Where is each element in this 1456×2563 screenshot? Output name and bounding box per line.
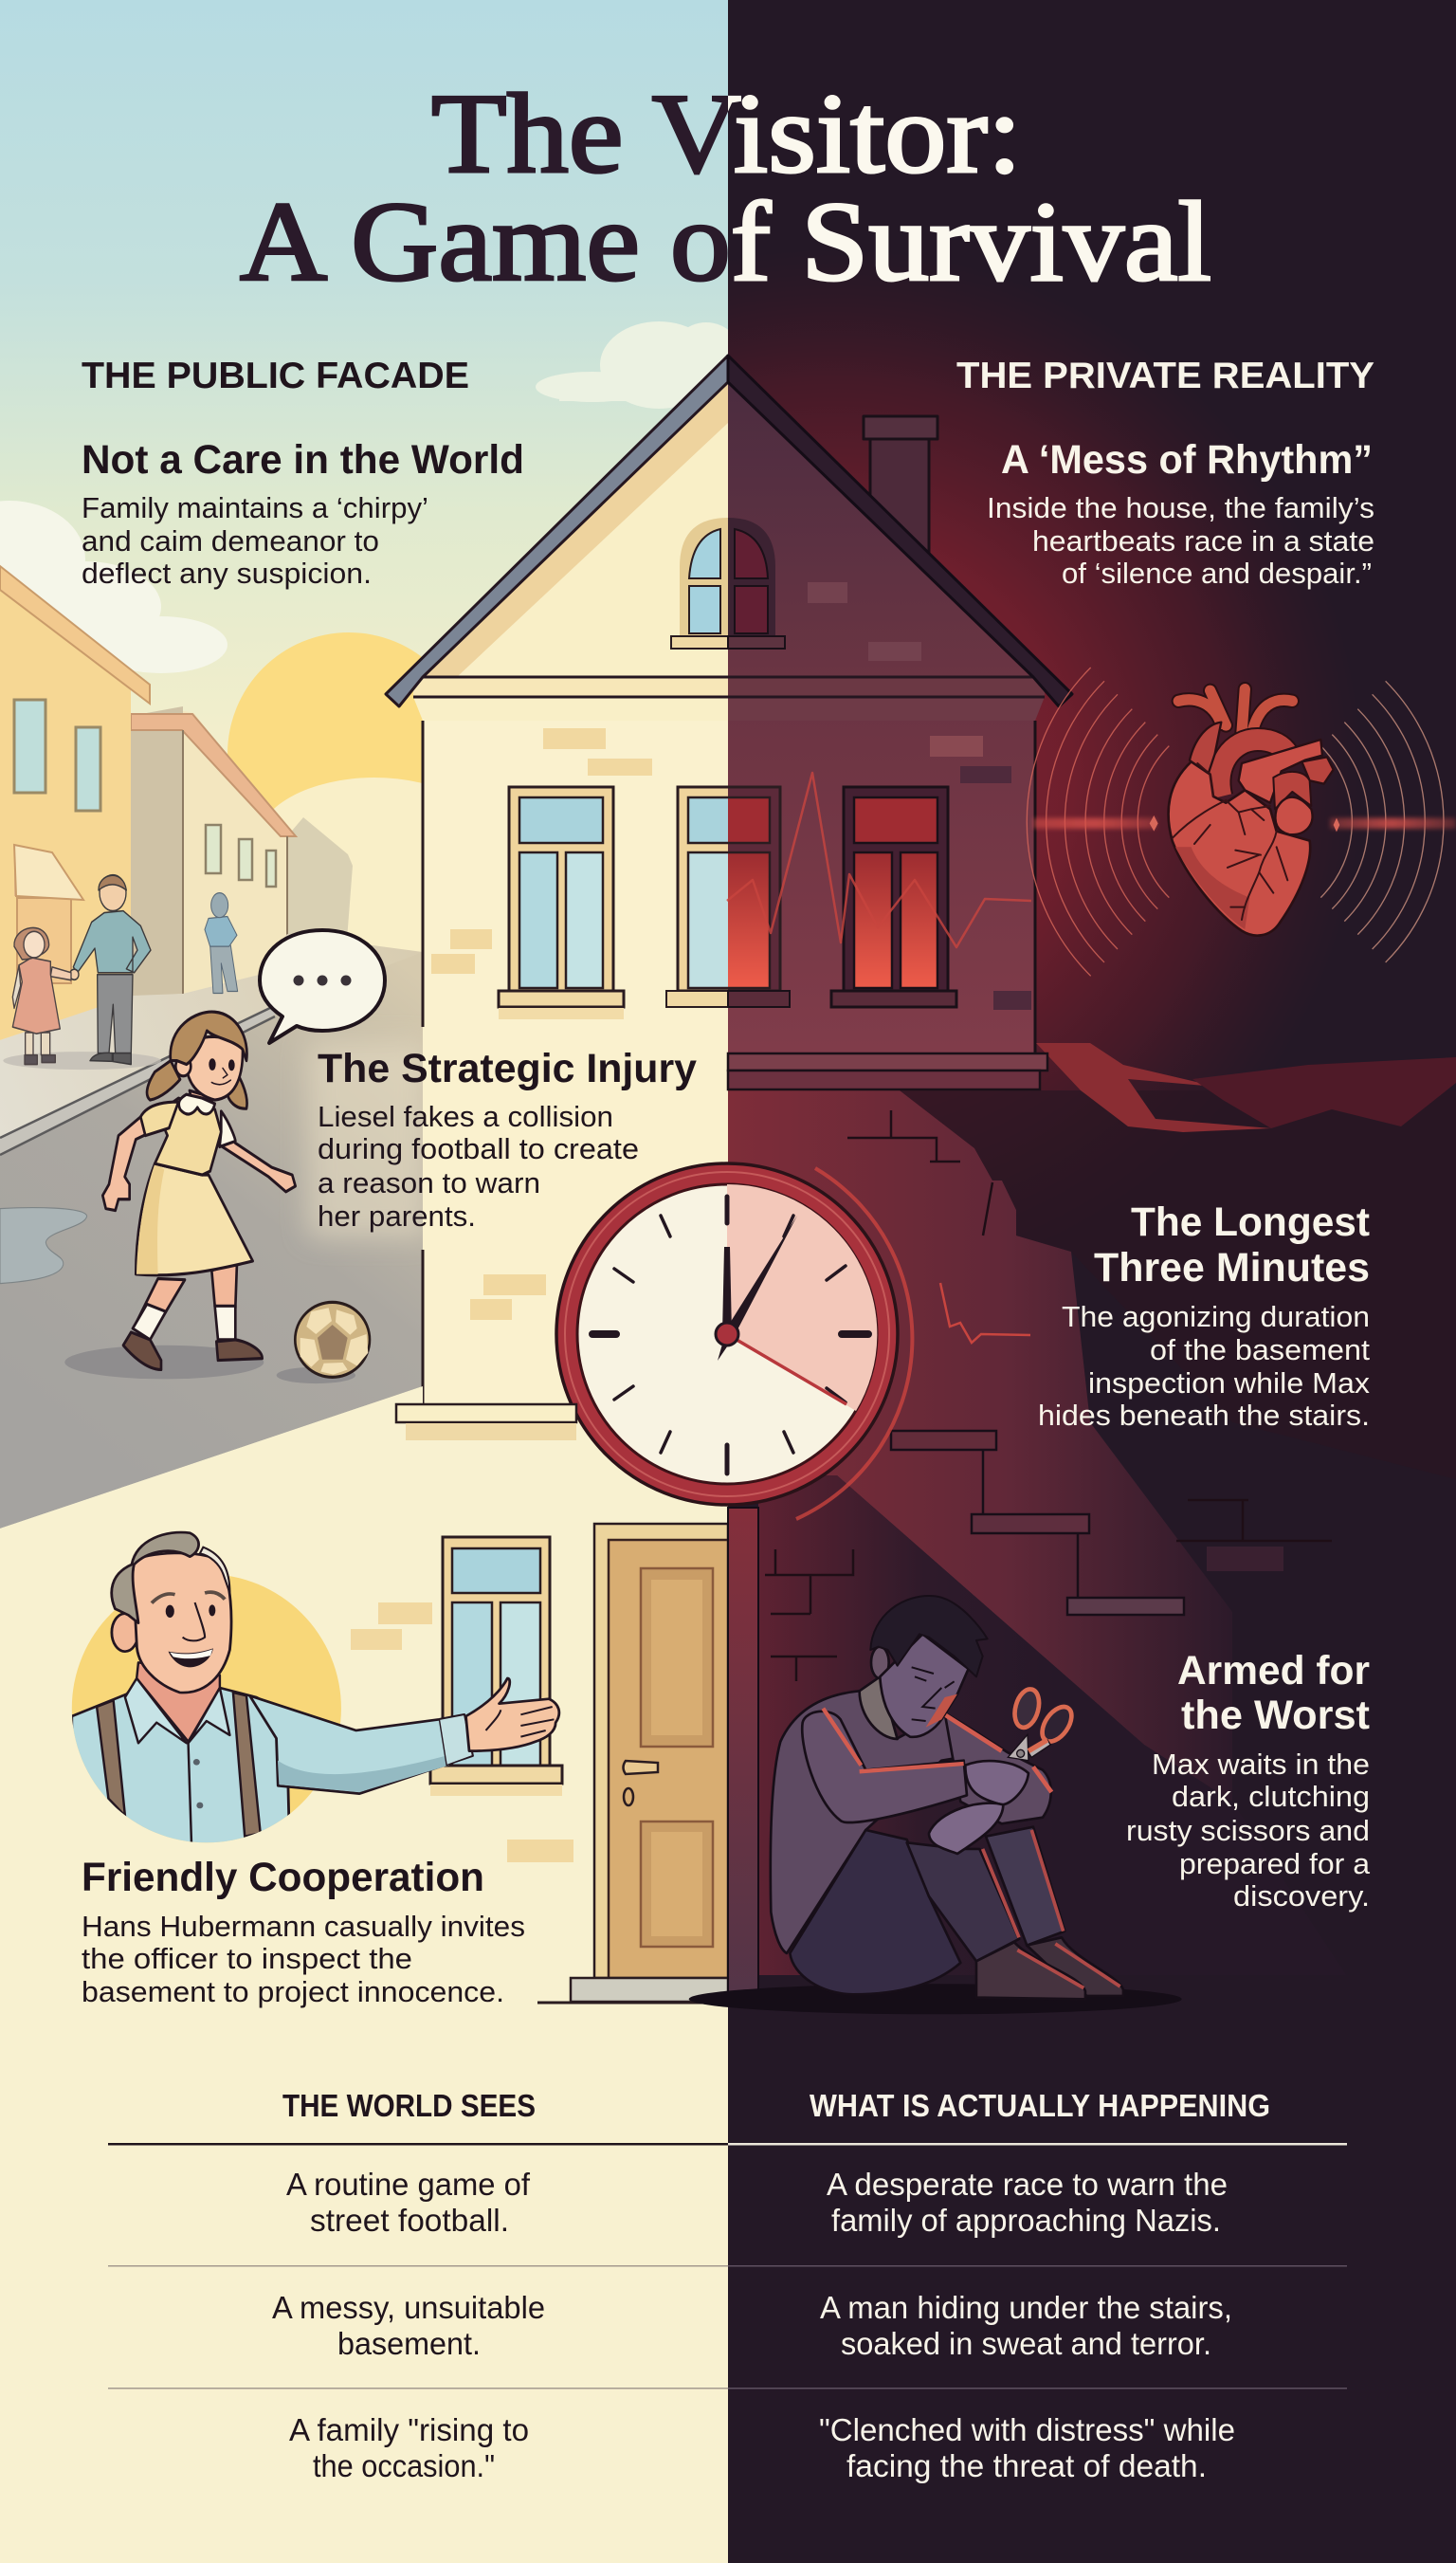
legs [123, 1263, 263, 1369]
distant figures and puddle [0, 875, 238, 1284]
ventricles [1169, 761, 1310, 936]
text block: not a care in the world: Family maintains a ‘chirpy’ [82, 491, 428, 524]
house: left half wall [423, 697, 728, 1519]
ledge shadow [406, 1423, 576, 1440]
text block: armed for the worst: rusty scissors and [1126, 1814, 1370, 1847]
text block: strategic injury: during football to create [318, 1132, 639, 1165]
lower left window [430, 1537, 562, 1796]
ear [871, 1647, 889, 1678]
table row 3 [289, 2412, 1235, 2483]
text block: not a care in the world: deflect any suspicion. [82, 557, 372, 590]
table row 3: A family "rising to [289, 2412, 529, 2447]
icon: clock [556, 1163, 912, 1519]
table row 1: family of approaching Nazis. [831, 2203, 1221, 2238]
ear [112, 1614, 138, 1652]
text block: strategic injury: her parents. [318, 1199, 476, 1233]
dark recess [900, 1090, 1456, 1479]
table row 2 [108, 2290, 1347, 2389]
roof right [728, 356, 1072, 706]
figure: Max with scissors [689, 1596, 1182, 2014]
small pulse line by clock [940, 1283, 1030, 1343]
table row 1: A routine game of [286, 2167, 531, 2202]
basement walls, crack and stairs [728, 1043, 1456, 1975]
text block: friendly cooperation [82, 1855, 525, 2008]
table row 3: "Clenched with distress" while [819, 2412, 1235, 2447]
collar [125, 1678, 229, 1743]
table row 2: A man hiding under the stairs, [820, 2290, 1232, 2325]
neck [136, 1662, 220, 1742]
hair [112, 1532, 199, 1623]
attic window [671, 518, 785, 649]
text block: armed for the worst: the Worst [1181, 1693, 1370, 1738]
text block: mess of rhythm: of ‘silence and despair.” [1062, 557, 1372, 590]
title: The Visitor: [431, 70, 1022, 196]
clouds [536, 321, 742, 409]
aortic arch [1219, 740, 1287, 796]
text block: mess of rhythm: Inside the house, the family’s [987, 491, 1374, 524]
text block: armed for the worst: prepared for a [1179, 1847, 1371, 1880]
title [240, 70, 1211, 304]
text block: longest three minutes: Three Minutes [1094, 1245, 1370, 1291]
clock ticks [592, 1197, 868, 1474]
panel: right private background [728, 0, 1456, 2563]
auricle [1190, 723, 1221, 778]
cream haze [274, 778, 421, 875]
table row 3: facing the threat of death. [846, 2448, 1207, 2483]
collar [860, 1676, 898, 1739]
back torso [771, 1691, 998, 1953]
face [880, 1634, 969, 1737]
left window [499, 787, 624, 1019]
sidewalk [0, 934, 423, 1138]
child [12, 927, 71, 1065]
building yellow [0, 566, 150, 1040]
icon: pulse rings [1027, 668, 1456, 976]
text block: mess of rhythm [987, 437, 1374, 590]
table row 2: basement. [337, 2326, 481, 2361]
legs [790, 1830, 960, 1994]
father [70, 875, 151, 1065]
crack upper [1036, 1043, 1271, 1132]
portrait: Hans Hubermann [72, 1532, 559, 1849]
arms [102, 1117, 296, 1211]
wall right [728, 697, 1035, 1053]
scissors [1008, 1687, 1078, 1761]
text block: armed for the worst: Max waits in the [1152, 1748, 1370, 1781]
house: right half with chimney, roof and gable [386, 356, 1072, 1053]
panel: left public background [0, 0, 728, 2563]
coronary lines [1173, 763, 1287, 920]
soft patch behind text [308, 1043, 427, 1237]
head [147, 1012, 247, 1114]
table row 2: soaked in sweat and terror. [841, 2326, 1211, 2361]
text block: not a care in the world [82, 437, 524, 590]
road [0, 952, 423, 1529]
girl Liesel [64, 1012, 296, 1379]
left cloud [0, 501, 228, 673]
lower ledge of house [396, 1404, 576, 1422]
table header: WHAT IS ACTUALLY HAPPENING [810, 2088, 1270, 2123]
lit wall [728, 1090, 1232, 1802]
steps [891, 1431, 1184, 1615]
text block: mess of rhythm: A ‘Mess of Rhythm” [1001, 437, 1373, 483]
street scene [0, 321, 742, 1529]
sun [228, 632, 423, 809]
text block: strategic injury: The Strategic Injury [318, 1046, 697, 1091]
eaves [413, 677, 1045, 721]
text block: strategic injury: a reason to warn [318, 1166, 540, 1199]
text block: longest three minutes: hides beneath the stairs. [1038, 1399, 1370, 1432]
roof left [386, 356, 728, 706]
crack right band [1192, 1057, 1456, 1128]
under stair shadow [758, 1475, 1346, 1975]
text block: longest three minutes: The Longest [1131, 1199, 1370, 1245]
comparison table [108, 2088, 1347, 2483]
shirt and suspenders [72, 1678, 290, 1849]
building far [288, 817, 353, 935]
icon: football [277, 1302, 370, 1383]
face [152, 1592, 225, 1667]
text block: armed for the worst: Armed for [1177, 1648, 1370, 1693]
hand [465, 1678, 559, 1751]
hands [965, 1761, 1028, 1804]
brick [1207, 1547, 1283, 1571]
text block: friendly cooperation: Friendly Cooperation [82, 1855, 484, 1900]
head [132, 1553, 231, 1693]
heading: public facade: THE PUBLIC FACADE [82, 356, 469, 396]
text block: longest three minutes: of the basement [1150, 1333, 1370, 1366]
dress [136, 1098, 253, 1275]
door post on dark side [728, 1508, 758, 2001]
text block: longest three minutes: inspection while Max [1088, 1366, 1371, 1400]
bricks on lower wall [351, 1602, 573, 1862]
ledge [728, 1053, 1047, 1089]
text block: mess of rhythm: heartbeats race in a state [1032, 524, 1374, 558]
door [537, 1524, 758, 2003]
text block: strategic injury: Liesel fakes a collision [318, 1100, 613, 1133]
heartbeat line [727, 773, 1031, 947]
table row 3: the occasion." [313, 2448, 495, 2483]
clock hands [716, 1216, 846, 1404]
far arm [945, 1713, 1051, 1823]
wall lines [765, 1110, 1332, 1681]
curb [0, 1007, 275, 1155]
table header [108, 2088, 1347, 2145]
pulmonary trunk [1239, 740, 1322, 803]
text block: not a care in the world: and caim demeanor to [82, 524, 379, 558]
text block: armed for the worst: dark, clutching [1172, 1780, 1370, 1813]
title: A Game of Survival [240, 178, 1211, 304]
table header: THE WORLD SEES [282, 2088, 536, 2123]
text block: friendly cooperation: Hans Hubermann casually invites [82, 1910, 525, 1943]
text block: friendly cooperation: the officer to inspect the [82, 1942, 412, 1975]
boots [1027, 1937, 1123, 1996]
table row 1: A desperate race to warn the [827, 2167, 1228, 2202]
right red window [831, 787, 956, 1007]
top vessels [1178, 689, 1292, 733]
text block: armed for the worst [1126, 1648, 1371, 1913]
arm [249, 1695, 473, 1794]
building cream [131, 706, 296, 998]
table row 1 [108, 2167, 1347, 2266]
hair [870, 1596, 988, 1676]
text block: not a care in the world: Not a Care in the World [82, 437, 524, 483]
shade [1175, 847, 1249, 929]
chimney [864, 416, 937, 581]
right atrium [1275, 797, 1312, 834]
text block: strategic injury [318, 1046, 697, 1233]
passer-by [205, 893, 238, 994]
speech bubble [260, 930, 385, 1043]
lower left wall [0, 1386, 728, 2563]
text block: armed for the worst: discovery. [1233, 1879, 1370, 1913]
heading: private reality: THE PRIVATE REALITY [956, 356, 1374, 396]
gable [728, 382, 1033, 677]
text block: longest three minutes [1038, 1199, 1371, 1432]
table row 2: A messy, unsuitable [272, 2290, 545, 2325]
text block: friendly cooperation: basement to project innocence. [82, 1975, 504, 2008]
near arm [802, 1712, 967, 1822]
table row 1: street football. [310, 2203, 509, 2238]
middle split window [666, 787, 790, 1007]
icon: anatomical heart [1169, 689, 1334, 936]
text block: longest three minutes: The agonizing duration [1062, 1300, 1370, 1333]
